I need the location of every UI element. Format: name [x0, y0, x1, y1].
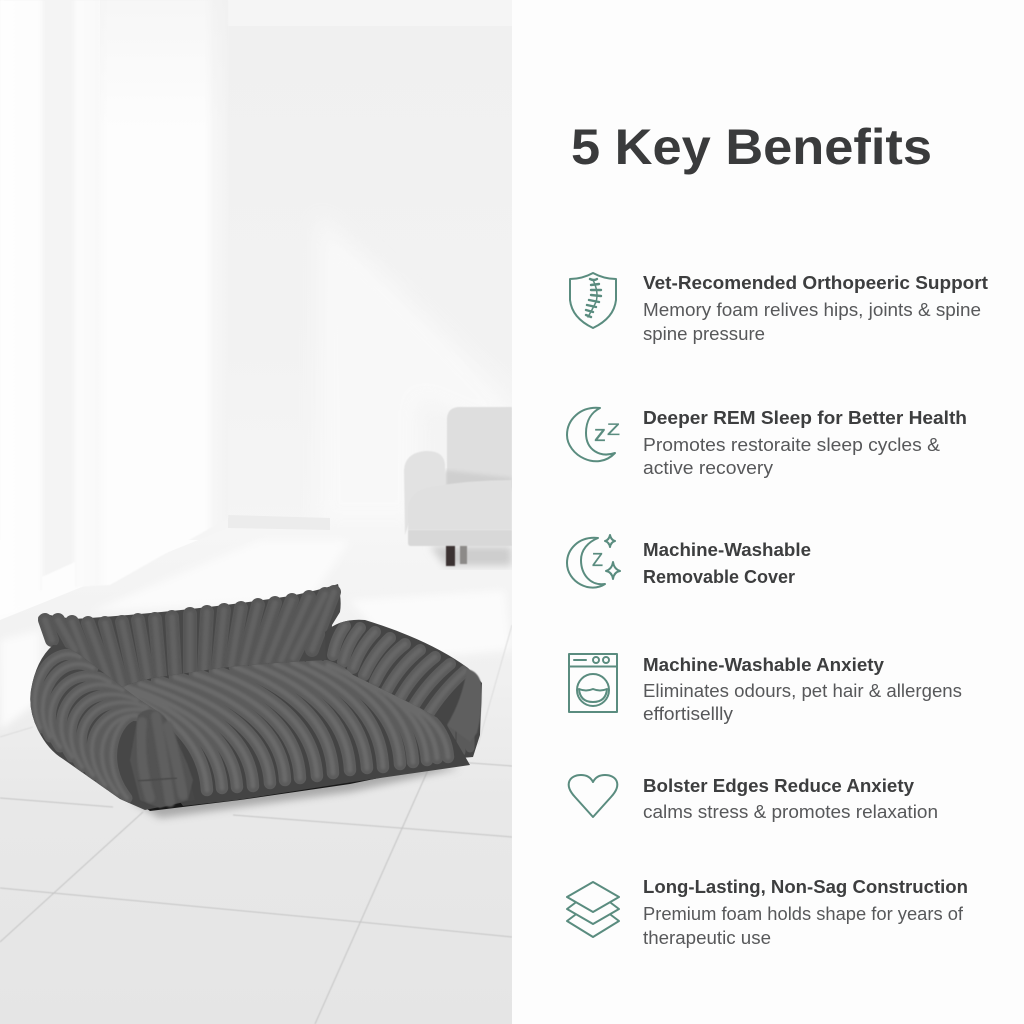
icon: moon with zz: Z	[607, 420, 620, 439]
icon: moon with zz: z	[594, 421, 606, 446]
benefit 1: orthopedic support	[570, 272, 988, 344]
floor	[0, 528, 512, 1024]
benefit 1 text	[643, 272, 988, 344]
benefit 5: bolster edges	[569, 775, 938, 822]
panel: product photo	[0, 0, 512, 1024]
ceiling corner	[195, 0, 512, 26]
benefit 2 text: Deeper REM Sleep for Better Health	[643, 407, 967, 428]
benefit 3 text	[643, 539, 811, 587]
dog bed	[25, 584, 485, 818]
icon: shield with spine	[570, 273, 616, 328]
icon: moon with sparkles: Z	[592, 550, 603, 570]
right bolster end cap	[447, 669, 482, 742]
benefit 4 text: Machine-Washable Anxiety	[643, 654, 885, 675]
baseboard	[228, 515, 330, 530]
back bolster	[38, 584, 341, 695]
benefit 5 text	[643, 775, 938, 822]
sofa seat	[408, 480, 512, 530]
left bolster end cap	[130, 710, 193, 808]
sofa back lower shade	[445, 470, 512, 485]
benefit 2 text	[643, 407, 967, 478]
benefit 6 text: Long-Lasting, Non-Sag Construction	[643, 876, 968, 897]
benefit 6: construction	[567, 876, 968, 948]
icon: washing machine	[569, 654, 617, 712]
icon: moon with zz	[567, 408, 620, 461]
benefit 3 text: Removable Cover	[643, 566, 795, 587]
benefit 2 text: Promotes restoraite sleep cycles &	[643, 435, 940, 455]
benefit 5 text: Bolster Edges Reduce Anxiety	[643, 775, 915, 796]
sofa in background	[404, 407, 512, 566]
sofa arm	[404, 451, 445, 535]
sofa legs	[446, 544, 455, 566]
benefit 4: washing	[569, 654, 962, 724]
sofa base	[408, 530, 512, 546]
benefit 5 text: calms stress & promotes relaxation	[643, 802, 938, 822]
back wall	[197, 26, 512, 538]
central cushion	[115, 655, 475, 810]
benefit 6 text: Premium foam holds shape for years of	[643, 904, 964, 924]
benefit 1 text: Vet-Recomended Orthopeeric Support	[643, 272, 988, 293]
benefit 6 text	[643, 876, 968, 948]
icon: moon with sparkles	[567, 535, 620, 588]
benefit 2: deeper sleep	[567, 407, 967, 478]
benefit 1 text: Memory foam relives hips, joints & spine	[643, 300, 981, 320]
sofa back	[447, 407, 512, 488]
benefit 4 text	[643, 654, 962, 724]
bed base	[148, 778, 378, 811]
window light on wall	[318, 215, 512, 525]
right lower ribs	[448, 726, 474, 755]
benefit 3: washable cover	[567, 535, 811, 588]
benefit 4 text: Eliminates odours, pet hair & allergens	[643, 681, 962, 701]
benefit 6 text: therapeutic use	[643, 928, 771, 948]
floor tile lines	[0, 625, 512, 1024]
right bolster	[325, 610, 485, 760]
curtain top shade	[100, 0, 228, 130]
bed shadow	[130, 760, 460, 818]
title: 5 Key Benefits	[571, 119, 932, 175]
panel: right background	[512, 0, 1024, 1024]
sofa shadow	[430, 546, 512, 566]
benefit 2 text: active recovery	[643, 458, 773, 478]
benefit 1 text: spine pressure	[643, 324, 765, 344]
benefit 4 text: effortisellly	[643, 704, 733, 724]
floor light patches	[1, 604, 507, 724]
curtains	[0, 0, 210, 584]
icon: foam layers	[567, 882, 619, 937]
benefit 3 text: Machine-Washable	[643, 539, 811, 560]
icon: heart	[569, 775, 617, 817]
left bolster	[30, 645, 181, 810]
